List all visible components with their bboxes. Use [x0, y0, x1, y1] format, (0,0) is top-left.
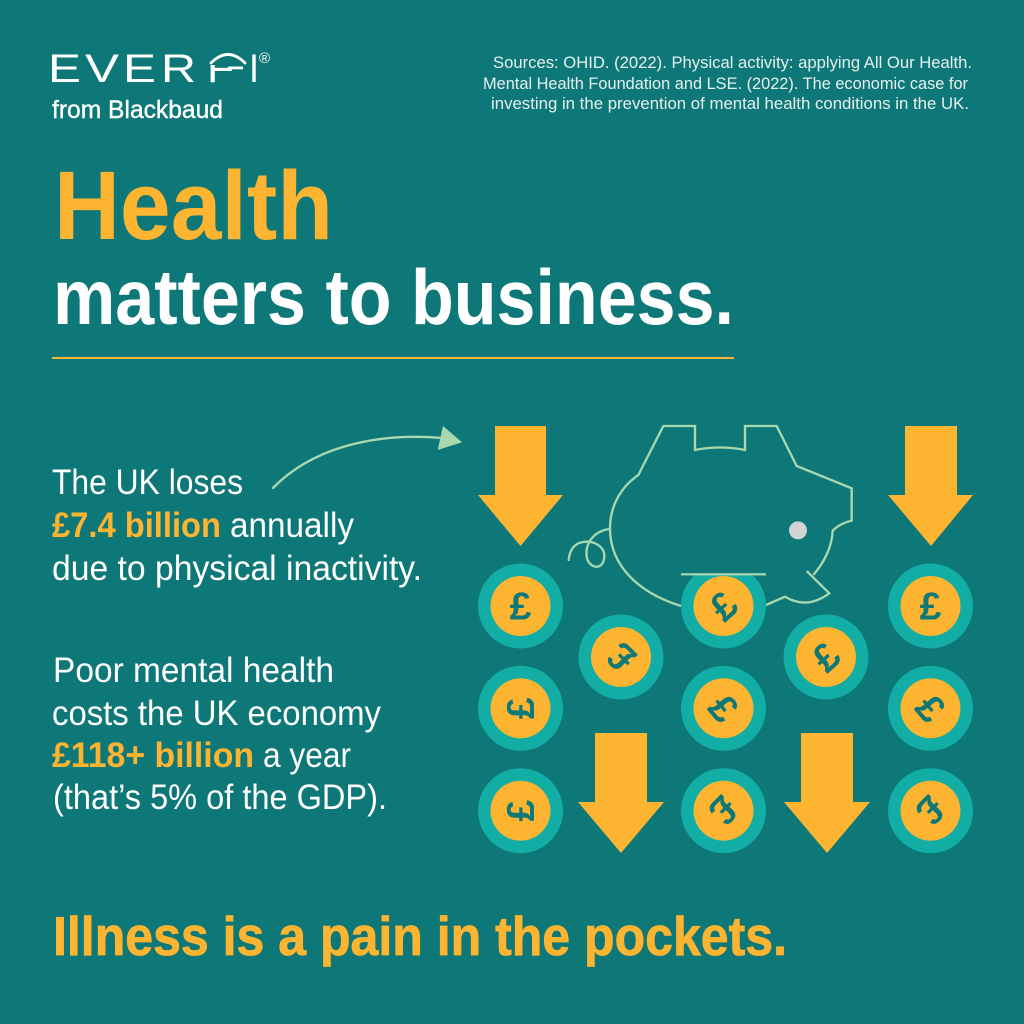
coin 3: [561, 597, 681, 717]
coin 8: [478, 768, 563, 853]
title: matters to business.: [53, 253, 734, 341]
coin 10: £: [907, 787, 953, 833]
coin 2: [888, 564, 973, 648]
coin 9: [663, 751, 784, 871]
arrow: top left: [478, 426, 563, 546]
logo: EVERFI from Blackbaud: F: [207, 47, 234, 91]
logo: EVERFI from Blackbaud: R: [161, 47, 196, 91]
coin 8: £: [500, 800, 543, 822]
text block: physical inactivity: The UK loses: [52, 463, 243, 502]
text block: mental health: (that’s 5% of the GDP).: [53, 778, 387, 817]
coin 1: [478, 564, 563, 648]
logo: EVERFI from Blackbaud: [48, 47, 270, 124]
text block: mental health: a year: [263, 736, 351, 775]
coin 10: [870, 751, 991, 871]
sources text: investing in the prevention of mental health conditions in the UK.: [491, 95, 969, 113]
coin 3: £: [599, 633, 645, 679]
text block: mental health: £118+ billion: [52, 736, 254, 775]
sources text: Sources: OHID. (2022). Physical activity: applying All Our Health.: [493, 54, 972, 72]
coin entering piggy bank: £: [702, 583, 747, 630]
coin entering piggy bank: [681, 575, 766, 648]
logo: EVERFI from Blackbaud: E: [123, 47, 156, 91]
text block: physical inactivity: due to physical inactivity.: [52, 549, 422, 588]
coin 7: £: [906, 687, 953, 731]
arrow: lower middle right: [784, 733, 870, 853]
text block: physical inactivity: annually: [230, 506, 354, 545]
logo: EVERFI from Blackbaud: I: [249, 47, 259, 91]
title: [53, 151, 734, 341]
text block: mental health: [52, 651, 387, 817]
coin 5: £: [500, 697, 543, 719]
coin 1: £: [510, 586, 532, 628]
text block: mental health: Poor mental health: [53, 651, 334, 690]
logo: EVERFI from Blackbaud: E: [48, 47, 81, 91]
icon: piggy bank: [569, 426, 852, 606]
sources text: [483, 54, 972, 113]
title: Health: [54, 151, 333, 260]
closing statement: Illness is a pain in the pockets.: [53, 905, 787, 967]
text block: physical inactivity: £7.4 billion: [52, 506, 221, 545]
coin 4: [766, 597, 886, 717]
text block: physical inactivity: [52, 463, 422, 588]
sources text: Mental Health Foundation and LSE. (2022). The economic case for: [483, 75, 968, 93]
coin 7: [871, 648, 990, 768]
coin 5: [478, 666, 563, 751]
arrow: lower middle left: [578, 733, 664, 853]
curved arrow: [273, 426, 462, 488]
arrow: top right: [888, 426, 973, 546]
logo: EVERFI from Blackbaud: from Blackbaud: [52, 96, 223, 124]
text block: mental health: costs the UK economy: [52, 694, 381, 733]
logo: EVERFI from Blackbaud: V: [85, 47, 119, 91]
coin 9: £: [700, 787, 746, 833]
coin 6: [664, 648, 783, 768]
coin 2: £: [920, 586, 942, 628]
logo: EVERFI from Blackbaud: ®: [259, 50, 270, 67]
coin 6: £: [699, 687, 746, 731]
coin 4: £: [804, 634, 849, 681]
